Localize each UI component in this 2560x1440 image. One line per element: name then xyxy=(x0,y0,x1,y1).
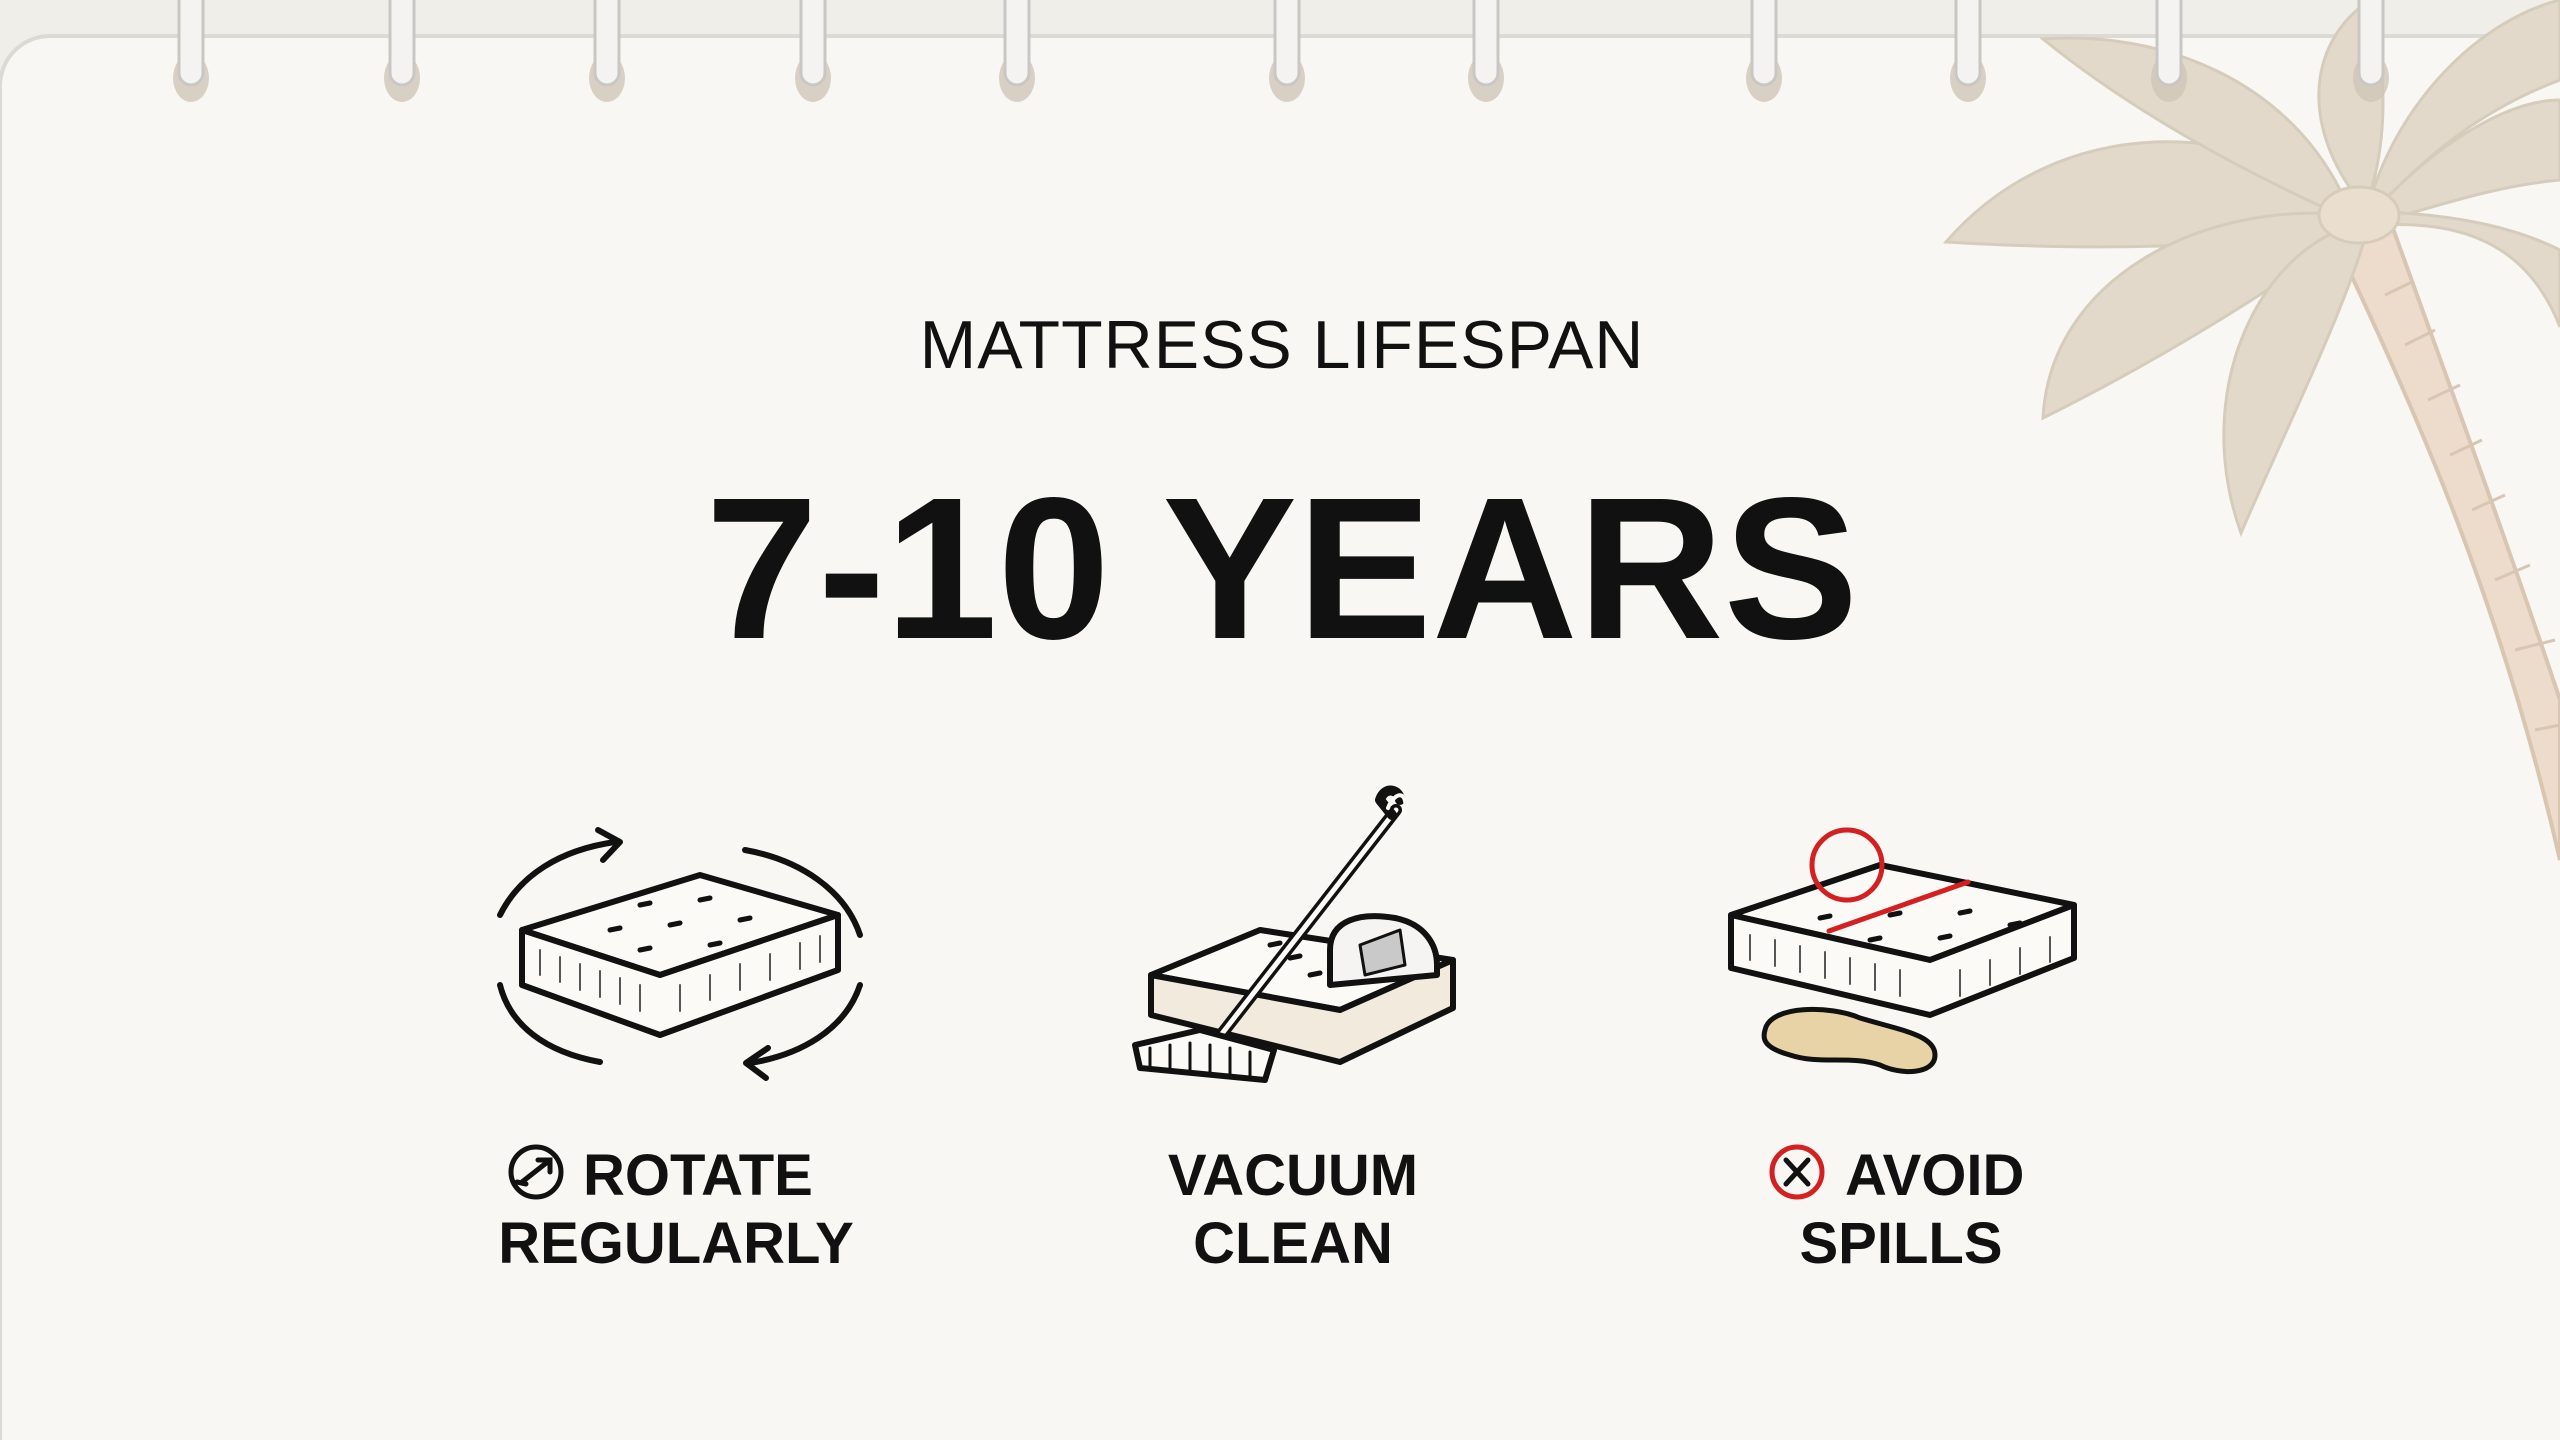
label: rotate regularly: REGULARLY xyxy=(498,1211,854,1276)
icon: no symbol xyxy=(1772,1147,1822,1197)
icon: rotate mattress xyxy=(500,830,860,1078)
label: avoid spills: AVOID xyxy=(1845,1143,2024,1208)
icon: avoid spills xyxy=(1731,830,2074,1072)
label: vacuum clean xyxy=(1168,1143,1418,1276)
label: vacuum clean: CLEAN xyxy=(1193,1211,1393,1276)
title: MATTRESS LIFESPAN xyxy=(920,307,1644,383)
coconut xyxy=(2319,187,2399,243)
label: rotate regularly xyxy=(498,1143,854,1276)
headline number: 7-10 YEARS xyxy=(706,455,1858,681)
palm tree xyxy=(1946,0,2560,860)
label: rotate regularly: ROTATE xyxy=(583,1143,813,1208)
label: avoid spills: SPILLS xyxy=(1799,1211,2003,1276)
label: avoid spills xyxy=(1772,1143,2024,1276)
icon: vacuum clean xyxy=(1135,791,1453,1080)
icon: rotate circle xyxy=(511,1147,561,1197)
label: vacuum clean: VACUUM xyxy=(1168,1143,1418,1208)
spiral rings xyxy=(173,0,2389,102)
fronds xyxy=(1946,0,2560,533)
trunk xyxy=(2330,220,2560,860)
